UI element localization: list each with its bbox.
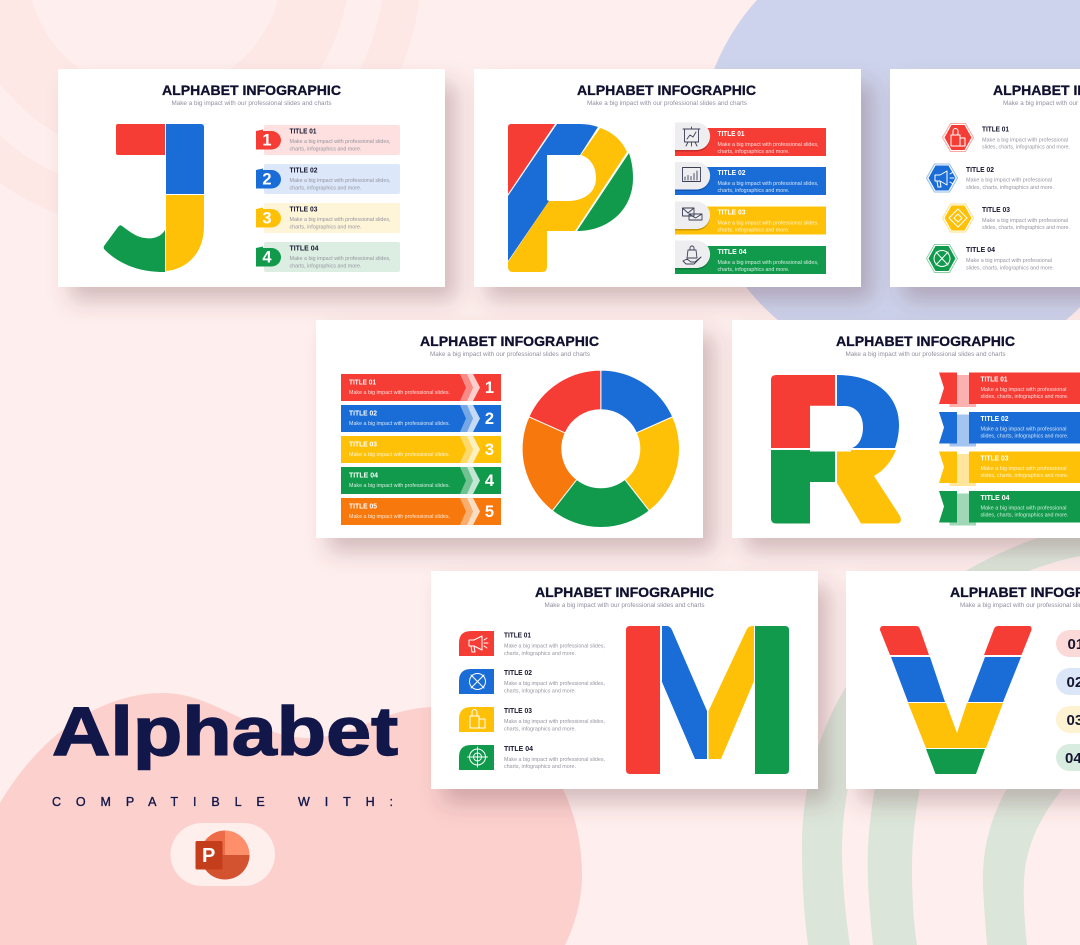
row 3: hexagon slide: TITLE 03	[982, 207, 1010, 214]
ribbon row 1: Make a big impact with professional	[980, 387, 1066, 393]
row 2: J slide: charts, infographics and more.	[290, 185, 362, 191]
arrow row 2: 2	[485, 410, 494, 428]
arrow row 4: Make a big impact with professional slides.	[349, 483, 450, 489]
background: green arcs	[802, 526, 1080, 945]
letter P	[508, 124, 633, 272]
row 3: J slide	[256, 203, 400, 233]
row 4: J slide	[256, 242, 400, 272]
arrow row 3	[341, 436, 501, 463]
ribbon row 2: slides, charts, infographics and more.	[980, 434, 1069, 440]
arrow row 1: TITLE 01	[349, 380, 376, 386]
row 1: P slide	[675, 122, 826, 156]
heading: J slide: ALPHABET INFOGRAPHIC	[162, 83, 341, 98]
row 2: P slide: charts, infographics and more.	[718, 188, 790, 194]
subheading: J slide: Make a big impact with our professional slides and charts	[172, 100, 332, 107]
row 3: M slide	[459, 707, 605, 732]
row 1: hexagon slide: slides, charts, infographics and more.	[982, 145, 1070, 151]
icon: presentation board	[683, 127, 700, 146]
heading: P slide: ALPHABET INFOGRAPHIC	[577, 83, 756, 98]
row 1: P slide: TITLE 01	[718, 131, 745, 138]
letter V	[880, 626, 1032, 774]
pill 03	[1056, 706, 1080, 733]
panel: letter J slide	[58, 69, 445, 287]
row 1: J slide	[256, 125, 400, 155]
row 3: P slide	[675, 202, 826, 234]
row 4: hexagon slide: slides, charts, infographics and more.	[966, 266, 1054, 272]
row 2: M slide: charts, infographics and more.	[504, 688, 576, 694]
row 2: M slide	[459, 669, 605, 694]
row 4: M slide	[459, 745, 605, 770]
heading: O slide: ALPHABET INFOGRAPHIC	[420, 334, 599, 349]
compatible with label: COMPATIBLE WITH:	[52, 795, 393, 809]
pill 02	[1056, 668, 1080, 695]
row 2: hexagon slide: Make a big impact with professional	[966, 178, 1052, 184]
row 4: hexagon slide: TITLE 04	[966, 247, 995, 254]
row 4: P slide: Make a big impact with professional slides,	[718, 260, 819, 266]
ribbon row 3: TITLE 03	[980, 456, 1009, 462]
pill 04	[1056, 744, 1080, 771]
arrow row 4: TITLE 04	[349, 472, 378, 480]
row 4: hexagon slide: Make a big impact with professional	[966, 258, 1052, 264]
row 2: P slide: Make a big impact with professional slides,	[718, 181, 819, 187]
arrow row 2	[341, 405, 501, 432]
row 1: J slide: Make a big impact with professional slides,	[290, 139, 391, 145]
row 1: P slide: charts, infographics and more.	[718, 149, 790, 155]
ribbon row 4: TITLE 04	[980, 495, 1010, 502]
arrow row 1: 1	[485, 379, 494, 397]
ribbon row 3: slides, charts, infographics and more.	[980, 473, 1069, 479]
row 3: P slide: TITLE 03	[718, 210, 746, 216]
row 2: hexagon slide: slides, charts, infographics and more.	[966, 185, 1054, 191]
row 3: hexagon slide: slides, charts, infographics and more.	[982, 225, 1070, 231]
row 2: J slide: 2	[262, 170, 272, 188]
arrow row 5: TITLE 05	[349, 504, 377, 510]
letter J	[104, 124, 204, 272]
row 1: hexagon slide	[942, 124, 1070, 152]
row 4: M slide: charts, infographics and more.	[504, 764, 576, 770]
icon: PowerPoint badge	[170, 823, 275, 886]
row 1: M slide: charts, infographics and more.	[504, 651, 576, 657]
row 3: P slide: charts, infographics and more.	[718, 228, 790, 234]
icon: PowerPoint badge: P	[202, 845, 215, 867]
row 1: J slide: 1	[262, 132, 272, 150]
row 1: hexagon slide: Make a big impact with professional	[982, 137, 1068, 143]
row 4: J slide: charts, infographics and more.	[290, 263, 362, 269]
arrow row 2: TITLE 02	[349, 410, 377, 418]
panel: hexagon slide	[890, 69, 1080, 287]
row 3: M slide: charts, infographics and more.	[504, 726, 576, 732]
arrow row 3: Make a big impact with professional slides.	[349, 452, 450, 458]
row 4: P slide: charts, infographics and more.	[718, 267, 790, 273]
row 1: M slide: Make a big impact with professional slides,	[504, 644, 605, 650]
row 2: M slide: Make a big impact with professional slides,	[504, 681, 605, 687]
main title: Alphabet	[52, 693, 398, 770]
pill 01	[1056, 630, 1080, 657]
background: pink blob	[0, 693, 582, 945]
panel: donut letter O slide	[316, 320, 703, 538]
panel: letter R slide	[732, 320, 1080, 538]
subheading: M slide: Make a big impact with our professional slides and charts	[544, 602, 704, 609]
row 4: J slide: TITLE 04	[290, 246, 319, 252]
panel: letter M slide	[431, 571, 818, 789]
ribbon row 2: Make a big impact with professional	[980, 426, 1066, 432]
row 2: J slide	[256, 164, 400, 194]
row 3: J slide: Make a big impact with professional slides,	[290, 217, 391, 223]
row 4: P slide: TITLE 04	[718, 249, 747, 256]
icon: bar chart window	[682, 168, 700, 182]
arrow row 4	[341, 467, 501, 494]
row 2: M slide: TITLE 02	[504, 670, 532, 677]
heading: R slide: ALPHABET INFOGRAPHIC	[836, 334, 1015, 349]
arrow row 1: Make a big impact with professional slides.	[349, 390, 450, 396]
row 3: J slide: TITLE 03	[290, 206, 318, 214]
arrow row 2: Make a big impact with professional slides.	[349, 421, 450, 427]
subheading: O slide: Make a big impact with our professional slides and charts	[430, 351, 590, 358]
arrow row 4: 4	[485, 472, 495, 490]
background: blue circle	[699, 0, 1080, 373]
arrow row 1	[341, 374, 501, 401]
ribbon row 1	[939, 372, 1080, 407]
row 1: J slide: TITLE 01	[290, 128, 317, 136]
ribbon row 1: TITLE 01	[980, 376, 1008, 384]
ribbon row 3: Make a big impact with professional	[980, 466, 1066, 472]
row 2: J slide: Make a big impact with professional slides,	[290, 178, 391, 184]
row 3: hexagon slide: Make a big impact with professional	[982, 218, 1068, 224]
icon: hand holding bag	[683, 246, 701, 264]
row 4: J slide: 4	[262, 248, 272, 266]
row 2: hexagon slide: TITLE 02	[966, 167, 994, 174]
ribbon row 4: Make a big impact with professional	[980, 506, 1066, 512]
row 1: M slide: TITLE 01	[504, 632, 531, 640]
row 1: M slide	[459, 631, 605, 657]
row 1: P slide: Make a big impact with professional slides,	[718, 142, 819, 148]
subheading: R slide: Make a big impact with our professional slides and charts	[846, 351, 1006, 358]
row 4: P slide	[675, 240, 826, 274]
row 2: J slide: TITLE 02	[290, 168, 318, 174]
row 1: hexagon slide: TITLE 01	[982, 126, 1009, 134]
heading: M slide: ALPHABET INFOGRAPHIC	[535, 585, 714, 600]
row 2: P slide: TITLE 02	[718, 170, 746, 177]
row 3: M slide: Make a big impact with professional slides,	[504, 719, 605, 725]
row 4: M slide: Make a big impact with professional slides,	[504, 757, 605, 763]
row 4: M slide: TITLE 04	[504, 746, 533, 753]
row 1: J slide: charts, infographics and more.	[290, 146, 362, 152]
row 4: J slide: Make a big impact with professional slides,	[290, 256, 391, 262]
row 3: M slide: TITLE 03	[504, 708, 532, 715]
row 3: P slide: Make a big impact with professional slides,	[718, 220, 819, 226]
row 2: P slide	[675, 162, 826, 195]
row 2: hexagon slide	[926, 164, 1054, 192]
arrow row 3: 3	[485, 441, 494, 459]
row 3: hexagon slide	[942, 204, 1070, 232]
row 3: J slide: 3	[262, 210, 272, 228]
arrow row 5	[341, 498, 501, 525]
ribbon row 3	[939, 452, 1080, 486]
ribbon row 4: slides, charts, infographics and more.	[980, 512, 1069, 518]
subheading: P slide: Make a big impact with our professional slides and charts	[587, 100, 747, 107]
panel: letter V slide	[846, 571, 1080, 789]
arrow row 3: TITLE 03	[349, 442, 377, 448]
letter M	[626, 626, 789, 774]
panel: letter P slide	[474, 69, 861, 287]
ribbon row 1: slides, charts, infographics and more.	[980, 394, 1069, 400]
donut chart	[522, 370, 680, 528]
row 3: J slide: charts, infographics and more.	[290, 224, 362, 230]
letter R	[771, 375, 901, 524]
ribbon row 4	[939, 491, 1080, 526]
arrow row 5: 5	[485, 503, 494, 521]
icon: envelopes	[682, 208, 702, 220]
ribbon row 2	[939, 412, 1080, 446]
ribbon row 2: TITLE 02	[980, 416, 1009, 423]
arrow row 5: Make a big impact with professional slides.	[349, 514, 450, 520]
row 4: hexagon slide	[926, 244, 1054, 272]
